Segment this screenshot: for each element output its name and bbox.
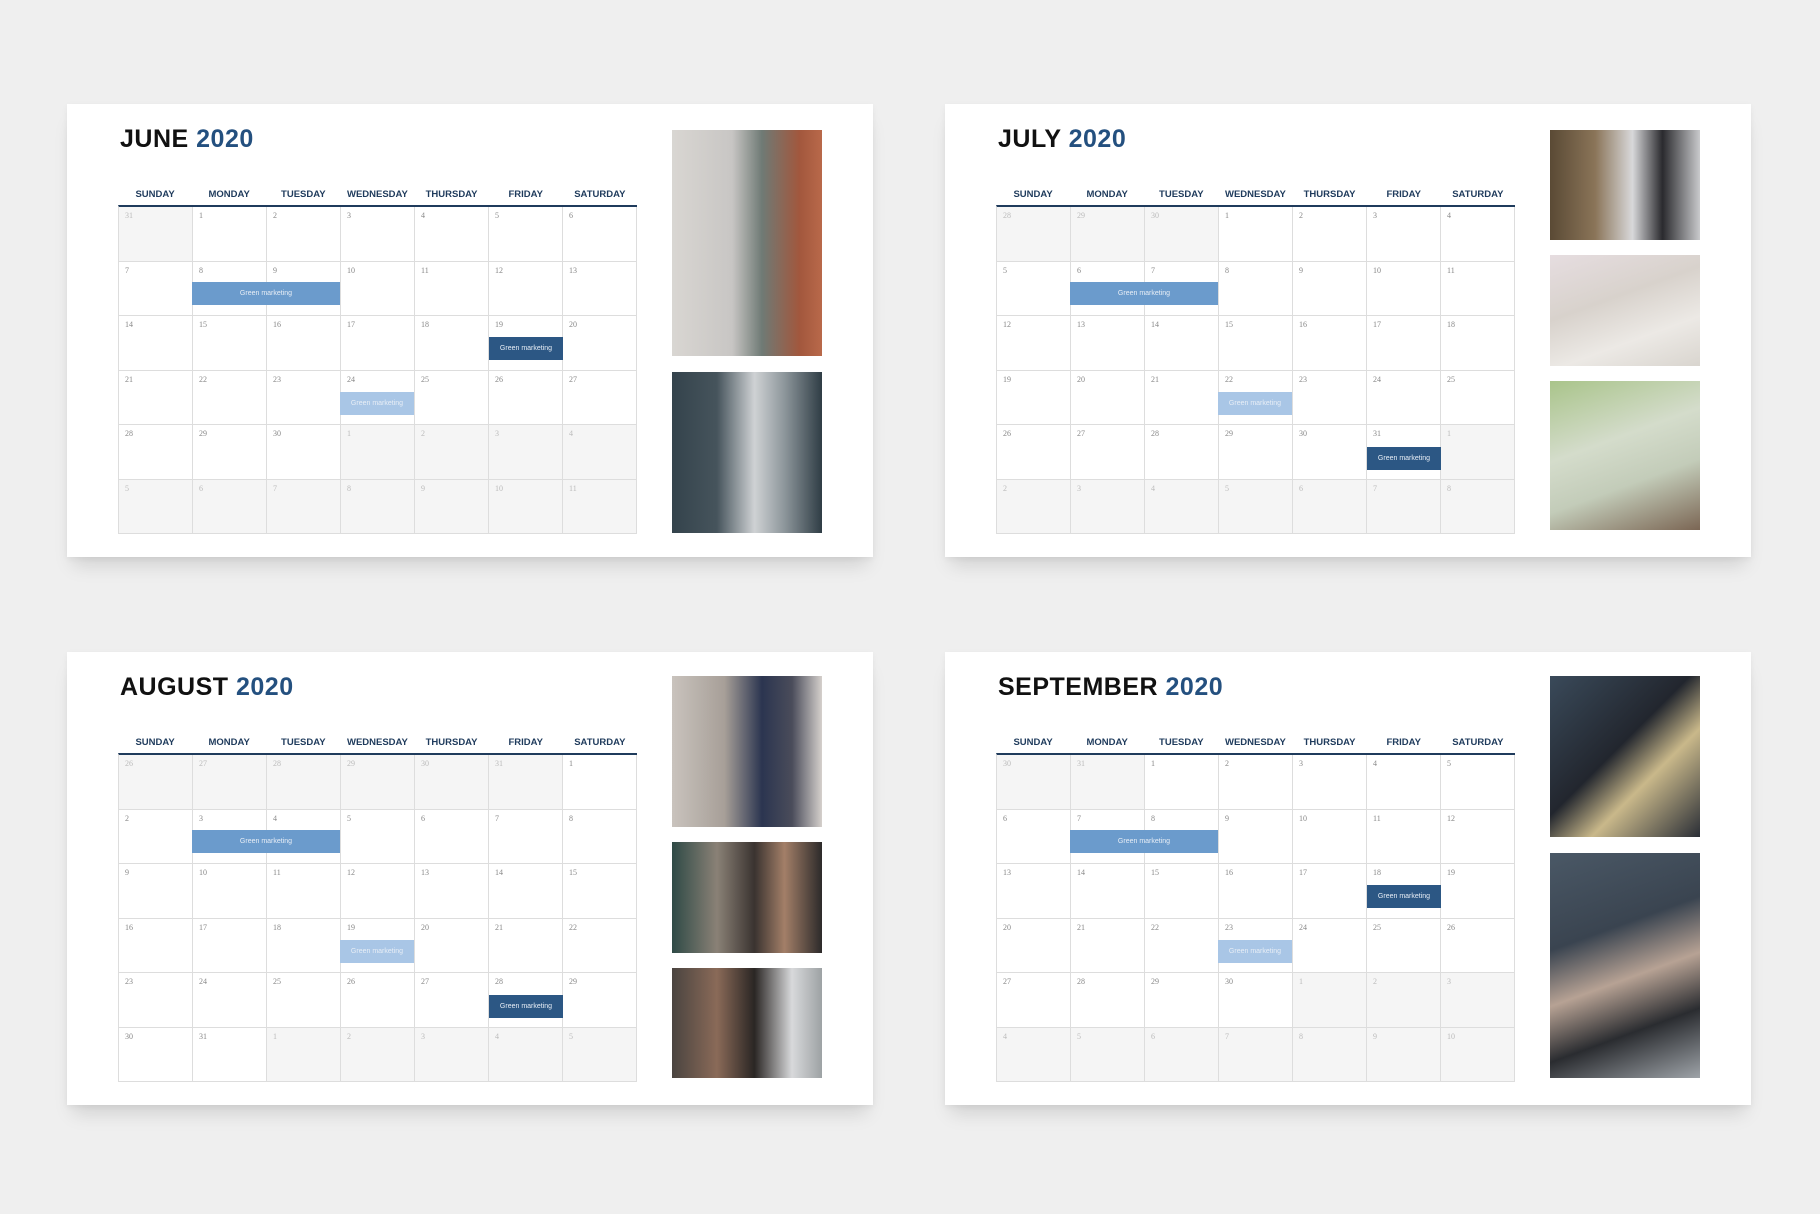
- calendar grid: August: 26: [125, 759, 133, 768]
- event: Green marketing Fri: [489, 337, 563, 360]
- weekday header: WEDNESDAY: [347, 189, 408, 200]
- calendar grid: September: 20: [1003, 922, 1011, 932]
- calendar grid: June: 17: [347, 320, 355, 329]
- calendar grid: June: 1: [199, 211, 203, 220]
- calendar grid: September: 3: [1299, 759, 1303, 768]
- calendar grid: August: 12: [347, 868, 355, 877]
- calendar grid: June: 11: [421, 266, 429, 274]
- calendar grid: July: 4: [1151, 484, 1155, 492]
- calendar grid: August: 3: [421, 1032, 425, 1040]
- calendar grid: June: [118, 205, 637, 534]
- event: Green marketing Wed: [1218, 940, 1292, 963]
- calendar grid: June: 31: [125, 211, 133, 220]
- calendar grid: September: 15: [1151, 868, 1159, 877]
- event: Green marketing Mon-Tue: Green marketing: [240, 290, 292, 297]
- event: Green marketing Wed: [340, 940, 414, 963]
- calendar grid: September: 28: [1077, 977, 1085, 986]
- calendar grid: July: 26: [1003, 429, 1011, 438]
- calendar grid: August: 4: [495, 1032, 499, 1040]
- calendar grid: June: 26: [495, 374, 503, 384]
- title: July: JULY 2020: [998, 125, 1126, 153]
- calendar grid: June: 3: [347, 211, 351, 220]
- calendar grid: September: 13: [1003, 868, 1011, 877]
- calendar grid: August: 1: [569, 759, 573, 768]
- calendar grid: August: [118, 753, 637, 1082]
- calendar grid: September: 29: [1151, 977, 1159, 986]
- weekday header: FRIDAY: [1386, 737, 1421, 748]
- calendar grid: June: 2: [421, 429, 425, 438]
- calendar grid: July: 6: [1077, 266, 1081, 274]
- calendar grid: July: 17: [1373, 320, 1381, 329]
- calendar grid: August: 14: [495, 868, 503, 877]
- calendar grid: July: 10: [1373, 266, 1381, 274]
- photo: hands on keyboard: [1550, 255, 1700, 366]
- weekday header: MONDAY: [208, 189, 250, 200]
- calendar grid: August: 26: [347, 977, 355, 986]
- weekday header: [135, 737, 626, 748]
- calendar grid: July: 1: [1225, 211, 1229, 220]
- calendar grid: September: 12: [1447, 814, 1455, 822]
- calendar grid: June: 10: [495, 484, 503, 492]
- calendar grid: June: 6: [199, 484, 203, 492]
- calendar grid: September: 23: [1225, 922, 1233, 932]
- calendar grid: July: 29: [1225, 429, 1233, 438]
- calendar grid: August: 31: [199, 1032, 207, 1040]
- calendar grid: August: 19: [347, 922, 355, 932]
- calendar grid: August: 17: [199, 922, 207, 932]
- calendar grid: June: 29: [199, 429, 207, 438]
- event: Green marketing Fri: [1367, 885, 1441, 908]
- calendar grid: July: 20: [1077, 374, 1085, 384]
- event: Green marketing Wed: Green marketing: [351, 948, 403, 955]
- calendar grid: June: 8: [199, 266, 203, 274]
- calendar grid: August: 30: [125, 1032, 133, 1040]
- calendar grid: August: 7: [495, 814, 499, 822]
- calendar grid: August: 24: [199, 977, 207, 986]
- calendar grid: September: 26: [1447, 922, 1455, 932]
- calendar grid: August: 16: [125, 922, 133, 932]
- calendar grid: August: 2: [347, 1032, 351, 1040]
- event: Green marketing Wed: Green marketing: [1229, 948, 1281, 955]
- photo: woman with glasses: [672, 372, 822, 533]
- calendar grid: July: 28: [1151, 429, 1159, 438]
- calendar grid: September: 22: [1151, 922, 1159, 932]
- title: September: SEPTEMBER 2020: [998, 673, 1223, 701]
- weekday header: [1013, 189, 1504, 200]
- calendar grid: July: 22: [1225, 374, 1233, 384]
- calendar grid: September: 19: [1447, 868, 1455, 877]
- calendar grid: September: 10: [1447, 1032, 1455, 1040]
- event: Green marketing Wed: [1218, 392, 1292, 415]
- photo: two colleagues: [672, 842, 822, 953]
- calendar grid: July: 31: [1373, 429, 1381, 438]
- calendar grid: September: 4: [1003, 1032, 1007, 1040]
- calendar grid: June: 13: [569, 266, 577, 274]
- event: Green marketing Mon-Tue: Green marketing: [240, 838, 292, 845]
- calendar grid: June: 10: [347, 266, 355, 274]
- weekday header: FRIDAY: [508, 737, 543, 748]
- calendar grid: September: 2: [1373, 977, 1377, 986]
- calendar grid: September: 17: [1299, 868, 1307, 877]
- calendar grid: September: 1: [1151, 759, 1155, 768]
- calendar grid: July: 8: [1225, 266, 1229, 274]
- panel: June 2020: [67, 104, 873, 557]
- calendar grid: July: 5: [1003, 266, 1007, 274]
- calendar grid: August: 30: [421, 759, 429, 768]
- weekday header: [135, 189, 626, 200]
- calendar grid: August: 28: [273, 759, 281, 768]
- photo: hands writing at laptop: [1550, 853, 1700, 1078]
- event: Green marketing Mon-Tue: [1070, 830, 1218, 853]
- calendar grid: September: 11: [1373, 814, 1381, 822]
- weekday header: FRIDAY: [508, 189, 543, 200]
- weekday header: SUNDAY: [135, 189, 175, 200]
- calendar grid: July: 21: [1151, 374, 1159, 384]
- calendar grid: June: 7: [273, 484, 277, 492]
- calendar grid: June: 11: [569, 484, 577, 492]
- calendar grid: June: 6: [569, 211, 573, 220]
- calendar grid: August: 27: [421, 977, 429, 986]
- calendar grid: June: 23: [273, 374, 281, 384]
- calendar grid: July: 6: [1299, 484, 1303, 492]
- calendar grid: June: 7: [125, 266, 129, 274]
- calendar grid: June: 4: [569, 429, 573, 438]
- weekday header: FRIDAY: [1386, 189, 1421, 200]
- calendar grid: August: 31: [495, 759, 503, 768]
- calendar grid: June: 14: [125, 320, 133, 329]
- calendar grid: August: 11: [273, 868, 281, 877]
- calendar grid: August: 3: [199, 814, 203, 822]
- calendar grid: June: 9: [421, 484, 425, 492]
- calendar grid: August: 21: [495, 922, 503, 932]
- weekday header: SATURDAY: [1452, 189, 1503, 200]
- event: Green marketing Wed: Green marketing: [1229, 400, 1281, 407]
- calendar grid: September: 6: [1151, 1032, 1155, 1040]
- panel: September 2020: [945, 652, 1751, 1105]
- calendar grid: June: 22: [199, 374, 207, 384]
- calendar grid: September: 18: [1373, 868, 1381, 877]
- calendar grid: June: 28: [125, 429, 133, 438]
- weekday header: MONDAY: [1086, 189, 1128, 200]
- calendar grid: June: 27: [569, 374, 577, 384]
- calendar grid: July: 29: [1077, 211, 1085, 220]
- calendar grid: September: 21: [1077, 922, 1085, 932]
- event: Green marketing Wed: Green marketing: [351, 400, 403, 407]
- calendar grid: September: [996, 753, 1515, 1082]
- calendar grid: September: 1: [1299, 977, 1303, 986]
- title: June: JUNE 2020: [120, 125, 254, 153]
- weekday header: SATURDAY: [1452, 737, 1503, 748]
- weekday header: THURSDAY: [1304, 737, 1356, 748]
- event: Green marketing Fri: [489, 995, 563, 1018]
- calendar grid: July: 11: [1447, 266, 1455, 274]
- calendar grid: July: [996, 205, 1515, 534]
- title: August: AUGUST 2020: [120, 673, 294, 701]
- calendar grid: June: 19: [495, 320, 503, 329]
- calendar grid: September: 10: [1299, 814, 1307, 822]
- panel: July 2020: [945, 104, 1751, 557]
- calendar grid: July: 27: [1077, 429, 1085, 438]
- weekday header: TUESDAY: [281, 737, 326, 748]
- calendar grid: July: 15: [1225, 320, 1233, 329]
- photo: woman at computer: [672, 130, 822, 356]
- calendar grid: August: 13: [421, 868, 429, 877]
- calendar grid: September: 9: [1373, 1032, 1377, 1040]
- calendar grid: September: 5: [1077, 1032, 1081, 1040]
- calendar grid: July: 2: [1003, 484, 1007, 492]
- calendar grid: July: 19: [1003, 374, 1011, 384]
- panel: August 2020: [67, 652, 873, 1105]
- weekday header: WEDNESDAY: [1225, 737, 1286, 748]
- calendar grid: July: 23: [1299, 374, 1307, 384]
- calendar grid: June: 16: [273, 320, 281, 329]
- calendar grid: June: 18: [421, 320, 429, 329]
- calendar grid: August: 2: [125, 814, 129, 822]
- calendar grid: August: 1: [273, 1032, 277, 1040]
- event: Green marketing Fri: Green marketing: [1378, 893, 1430, 900]
- calendar grid: July: 12: [1003, 320, 1011, 329]
- calendar grid: September: 8: [1299, 1032, 1303, 1040]
- weekday header: THURSDAY: [426, 189, 478, 200]
- calendar grid: June: 12: [495, 266, 503, 274]
- calendar grid: July: 28: [1003, 211, 1011, 220]
- calendar grid: August: 6: [421, 814, 425, 822]
- calendar grid: July: 13: [1077, 320, 1085, 329]
- event: Green marketing Fri: Green marketing: [500, 1003, 552, 1010]
- calendar grid: August: 8: [569, 814, 573, 822]
- event: Green marketing Mon-Tue: [192, 830, 340, 853]
- photo: man with phone: [1550, 676, 1700, 837]
- calendar grid: July: 4: [1447, 211, 1451, 220]
- calendar grid: July: 16: [1299, 320, 1307, 329]
- calendar grid: June: 3: [495, 429, 499, 438]
- calendar grid: September: 2: [1225, 759, 1229, 768]
- calendar grid: August: 29: [569, 977, 577, 986]
- photo: men meeting: [672, 968, 822, 1078]
- photo: laptop and phone: [1550, 381, 1700, 530]
- event: Green marketing Mon-Tue: Green marketing: [1118, 838, 1170, 845]
- calendar grid: September: 30: [1003, 759, 1011, 768]
- calendar grid: June: 24: [347, 374, 355, 384]
- calendar grid: September: 5: [1447, 759, 1451, 768]
- weekday header: SUNDAY: [1013, 737, 1053, 748]
- calendar grid: September: 7: [1225, 1032, 1229, 1040]
- calendar grid: July: 7: [1373, 484, 1377, 492]
- event: Green marketing Mon-Tue: [192, 282, 340, 305]
- calendar grid: June: 2: [273, 211, 277, 220]
- calendar grid: September: 16: [1225, 868, 1233, 877]
- calendar grid: August: 29: [347, 759, 355, 768]
- calendar grid: June: 15: [199, 320, 207, 329]
- event: Green marketing Fri: [1367, 447, 1441, 470]
- calendar grid: July: 3: [1373, 211, 1377, 220]
- calendar grid: September: 30: [1225, 977, 1233, 986]
- calendar grid: August: 15: [569, 868, 577, 877]
- calendar grid: August: 27: [199, 759, 207, 768]
- calendar grid: July: 5: [1225, 484, 1229, 492]
- calendar grid: June: 9: [273, 266, 277, 274]
- calendar grid: September: 3: [1447, 977, 1451, 986]
- calendar grid: July: 9: [1299, 266, 1303, 274]
- calendar grid: August: 5: [347, 814, 351, 822]
- calendar grid: August: 4: [273, 814, 277, 822]
- calendar grid: September: 9: [1225, 814, 1229, 822]
- weekday header: TUESDAY: [1159, 737, 1204, 748]
- calendar grid: July: 24: [1373, 374, 1381, 384]
- weekday header: WEDNESDAY: [347, 737, 408, 748]
- weekday header: MONDAY: [1086, 737, 1128, 748]
- calendar grid: August: 25: [273, 977, 281, 986]
- calendar grid: June: 5: [125, 484, 129, 492]
- weekday header: WEDNESDAY: [1225, 189, 1286, 200]
- weekday header: TUESDAY: [1159, 189, 1204, 200]
- calendar grid: September: 27: [1003, 977, 1011, 986]
- calendar grid: September: 8: [1151, 814, 1155, 822]
- calendar grid: June: 8: [347, 484, 351, 492]
- calendar grid: July: 7: [1151, 266, 1155, 274]
- calendar grid: September: 25: [1373, 922, 1381, 932]
- weekday header: TUESDAY: [281, 189, 326, 200]
- calendar grid: August: 5: [569, 1032, 573, 1040]
- calendar grid: June: 20: [569, 320, 577, 329]
- calendar grid: September: 6: [1003, 814, 1007, 822]
- weekday header: SATURDAY: [574, 737, 625, 748]
- calendar grid: July: 25: [1447, 374, 1455, 384]
- calendar grid: July: 30: [1299, 429, 1307, 438]
- calendar grid: September: 24: [1299, 922, 1307, 932]
- calendar grid: June: 5: [495, 211, 499, 220]
- calendar grid: June: 4: [421, 211, 425, 220]
- calendar grid: June: 21: [125, 374, 133, 384]
- photo: man leaning on desk: [1550, 130, 1700, 240]
- weekday header: MONDAY: [208, 737, 250, 748]
- calendar grid: June: 25: [421, 374, 429, 384]
- weekday header: THURSDAY: [1304, 189, 1356, 200]
- calendar grid: August: 10: [199, 868, 207, 877]
- calendar grid: August: 18: [273, 922, 281, 932]
- event: Green marketing Fri: Green marketing: [1378, 455, 1430, 462]
- calendar grid: September: 14: [1077, 868, 1085, 877]
- event: Green marketing Mon-Tue: Green marketing: [1118, 290, 1170, 297]
- calendar grid: July: 1: [1447, 429, 1451, 438]
- calendar grid: July: 8: [1447, 484, 1451, 492]
- calendar grid: September: 4: [1373, 759, 1377, 768]
- calendar grid: September: 7: [1077, 814, 1081, 822]
- calendar grid: August: 28: [495, 977, 503, 986]
- weekday header: SUNDAY: [135, 737, 175, 748]
- calendar grid: July: 18: [1447, 320, 1455, 329]
- weekday header: SATURDAY: [574, 189, 625, 200]
- photo: woman with laptop: [672, 676, 822, 827]
- weekday header: THURSDAY: [426, 737, 478, 748]
- weekday header: SUNDAY: [1013, 189, 1053, 200]
- calendar grid: August: 23: [125, 977, 133, 986]
- calendar grid: July: 14: [1151, 320, 1159, 329]
- calendar grid: July: 3: [1077, 484, 1081, 492]
- calendar grid: June: 30: [273, 429, 281, 438]
- calendar grid: August: 22: [569, 922, 577, 932]
- calendar grid: August: 20: [421, 922, 429, 932]
- weekday header: [1013, 737, 1504, 748]
- calendar grid: July: 30: [1151, 211, 1159, 220]
- calendar grid: September: 31: [1077, 759, 1085, 768]
- event: Green marketing Fri: Green marketing: [500, 345, 552, 352]
- calendar grid: July: 2: [1299, 211, 1303, 220]
- calendar grid: August: 9: [125, 868, 129, 877]
- event: Green marketing Mon-Tue: [1070, 282, 1218, 305]
- event: Green marketing Wed: [340, 392, 414, 415]
- calendar grid: June: 1: [347, 429, 351, 438]
